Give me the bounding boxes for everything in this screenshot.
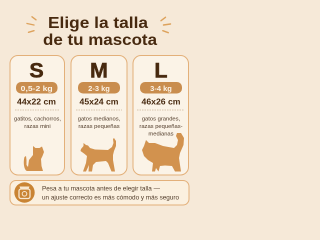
panel: weighing tip — [10, 180, 189, 205]
title — [43, 15, 157, 49]
weight pill M: 2-3 kg — [88, 84, 110, 93]
icon: right sparkle rays — [161, 17, 170, 33]
icon: medium cat — [80, 138, 116, 172]
description M: gatos medianos, — [78, 116, 121, 122]
description S: razas mini — [24, 124, 51, 130]
weight pill S: 0,5-2 kg — [21, 84, 53, 93]
tip text: un ajuste correcto es más cómodo y más seguro — [42, 194, 180, 202]
title: Elige la talla — [48, 15, 148, 32]
panel: size S — [10, 56, 64, 175]
dimensions S: 44x22 cm — [17, 98, 56, 106]
description M: razas pequeñas — [78, 124, 120, 130]
description L: gatos grandes, — [142, 116, 181, 122]
icon: scale — [14, 182, 35, 203]
panel: size L — [133, 56, 188, 175]
dimensions M: 45x24 cm — [80, 98, 119, 106]
icon: left sparkle rays — [27, 17, 36, 32]
description L — [139, 116, 183, 138]
size letter L: L — [154, 58, 168, 82]
tip text: Pesa a tu mascota antes de elegir talla — — [42, 186, 161, 192]
panel: size M — [71, 56, 127, 175]
icon: small cat — [24, 146, 44, 171]
dimensions L: 46x26 cm — [142, 98, 181, 106]
description L: razas pequeñas- — [139, 124, 183, 130]
size letter S: S — [29, 58, 44, 82]
tip text — [42, 186, 180, 202]
description S — [14, 116, 61, 130]
title: de tu mascota — [43, 32, 157, 49]
description S: gatitos, cachorros, — [14, 116, 61, 122]
description L: medianas — [148, 132, 174, 138]
size letter M: M — [90, 58, 108, 82]
weight pill L: 3-4 kg — [150, 84, 172, 93]
icon: large cat — [142, 133, 184, 172]
description M — [78, 116, 121, 130]
